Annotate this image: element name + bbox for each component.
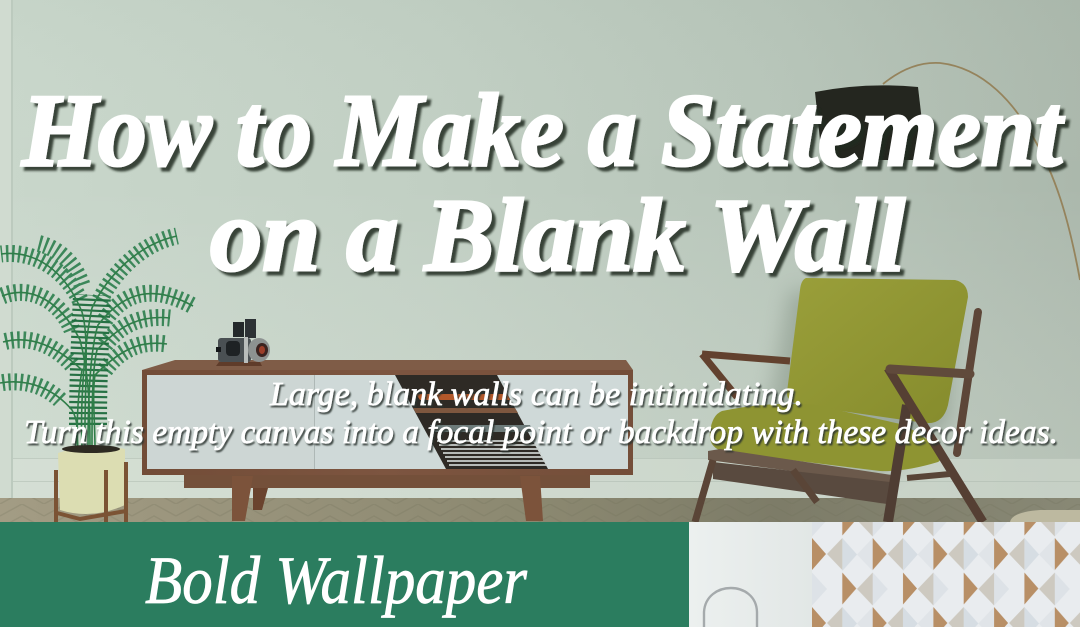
- hero title: on a Blank Wall: [210, 178, 905, 293]
- plain wall: [689, 522, 812, 627]
- hero title: [21, 73, 1065, 293]
- hero subtitle: [24, 376, 1058, 451]
- plant fronds: [0, 236, 193, 450]
- floor lamp: [815, 63, 1080, 522]
- chrome faucet: [704, 588, 757, 627]
- geometric wallpaper: [812, 522, 1080, 627]
- hero subtitle: Turn this empty canvas into a focal point or backdrop with these decor ideas.: [24, 414, 1058, 451]
- front leg left: [232, 476, 253, 521]
- front leg right: [520, 476, 543, 521]
- back-leg: [253, 488, 268, 510]
- pot stand: [56, 462, 126, 522]
- floor: [0, 498, 1080, 522]
- chair far arm: [702, 354, 790, 397]
- frond stems: [0, 236, 193, 450]
- chair wall shadow: [720, 290, 950, 480]
- stacked vinyl stripes: [437, 441, 547, 465]
- camera: [216, 319, 270, 366]
- open compartment: [395, 375, 548, 469]
- panel: bold wallpaper heading band: [0, 522, 689, 627]
- sideboard: [142, 360, 633, 521]
- plant pot: [58, 446, 125, 514]
- soil: [62, 445, 120, 453]
- chair back frame: [957, 312, 978, 453]
- panel: wallpaper photo: [689, 522, 1080, 627]
- frond dense centre: [88, 295, 92, 425]
- chair seat frame: [695, 368, 983, 522]
- sideboard top: [142, 360, 633, 370]
- armchair: [695, 278, 983, 522]
- sideboard base rail: [184, 475, 590, 488]
- hero subtitle: Large, blank walls can be intimidating.: [269, 376, 803, 413]
- lamp arc: [883, 63, 1080, 280]
- lamp shade: [815, 85, 923, 160]
- section heading: Bold Wallpaper: [145, 542, 527, 618]
- baseboard: [13, 458, 1080, 499]
- left corner wall: [0, 0, 13, 505]
- chair seat cushion: [710, 404, 943, 471]
- sliding doors: [147, 375, 628, 469]
- sideboard body: [142, 370, 633, 475]
- lamp base disk: [1010, 510, 1080, 522]
- potted plant: [0, 236, 193, 522]
- frond leaflets: [0, 236, 193, 400]
- chair back cushion: [787, 278, 968, 423]
